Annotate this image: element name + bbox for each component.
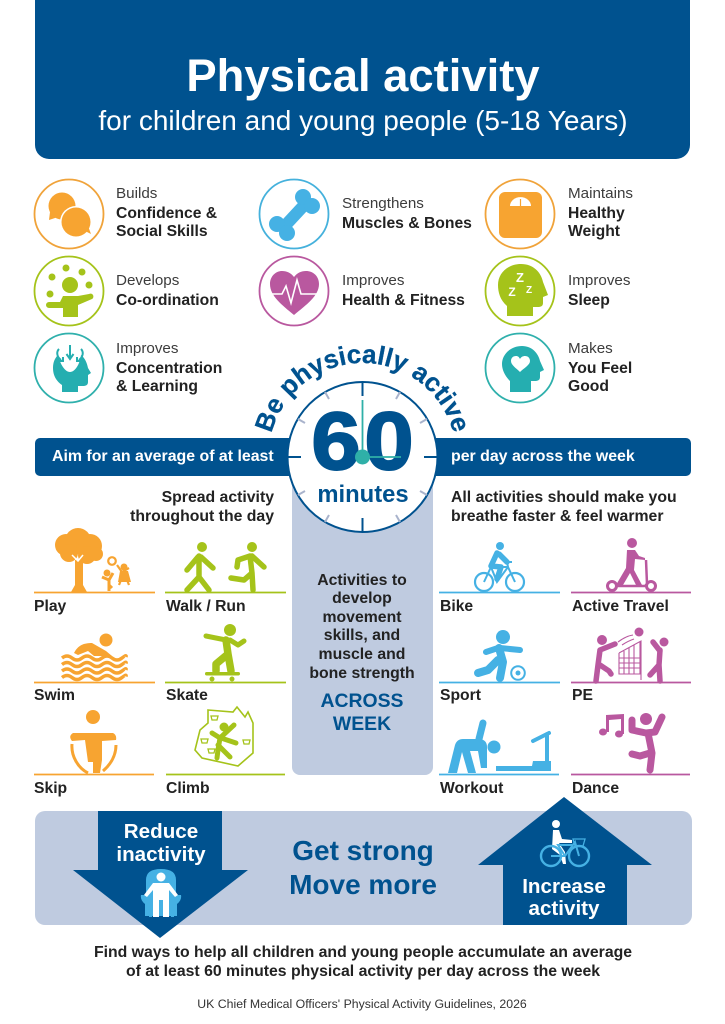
text: all activities	[451, 489, 677, 525]
panel: across week: develop	[332, 590, 392, 607]
benefit: confidence and social skills	[34, 180, 217, 248]
activity: swim: Swim	[34, 687, 75, 704]
aim bar: per day across the week	[451, 448, 635, 465]
text: all activities: breathe faster & feel warmer	[451, 508, 663, 525]
benefit: co-ordination: Co-ordination	[116, 292, 219, 309]
benefit: muscles and bones: Muscles & Bones	[342, 215, 472, 232]
benefit: feel good: Makes	[568, 340, 613, 357]
activity: active travel	[571, 538, 691, 615]
subtitle: for children and young people (5-18 Years)	[98, 105, 628, 136]
activity: dance	[571, 713, 690, 797]
arrow: reduce inactivity: Reduce	[124, 820, 198, 843]
60: 6	[311, 396, 361, 487]
panel: get strong move more: Get strong	[292, 835, 434, 866]
benefit: sleep: Improves	[568, 272, 631, 289]
activity: swim	[34, 634, 155, 704]
title: Physical activity	[186, 50, 540, 101]
activity: sport: Sport	[440, 687, 482, 704]
panel: across week: WEEK	[333, 713, 391, 735]
source credit: UK Chief Medical Officers' Physical Activity Guidelines, 2026	[197, 997, 527, 1011]
text: spread activity	[130, 489, 274, 525]
panel: across week: skills, and	[324, 627, 400, 644]
panel: across week	[292, 470, 433, 775]
arrow: increase activity: activity	[529, 897, 600, 920]
text: all activities: All activities should make you	[451, 489, 677, 506]
benefit: confidence and social skills: Confidence &	[116, 205, 217, 222]
activity: skip	[34, 710, 154, 797]
benefit: healthy weight	[486, 180, 633, 248]
activity: pe	[571, 628, 691, 704]
benefit: concentration and learning	[34, 334, 222, 402]
activity: skate	[165, 624, 286, 704]
activity: climb	[166, 707, 285, 797]
60	[311, 396, 414, 487]
panel: get strong move more	[35, 811, 692, 925]
benefit: concentration and learning: & Learning	[116, 378, 198, 395]
minutes: minutes	[317, 481, 409, 508]
panel: benefits	[34, 180, 633, 402]
footer message: of at least 60 minutes physical activity per day across the week	[126, 963, 600, 980]
clock	[288, 382, 438, 532]
activity: bike: Bike	[440, 598, 473, 615]
panel: across week: muscle and	[319, 646, 405, 663]
activity: skate: Skate	[166, 687, 208, 704]
panel: across week: movement	[322, 609, 402, 626]
benefit: health and fitness: Health & Fitness	[342, 292, 465, 309]
benefit: healthy weight: Healthy	[568, 205, 625, 222]
text: spread activity: throughout the day	[130, 508, 274, 525]
benefit: healthy weight: Maintains	[568, 185, 633, 202]
benefit: sleep: Z	[508, 285, 516, 299]
aim bar	[35, 438, 691, 476]
benefit: muscles and bones	[260, 180, 472, 248]
benefit: feel good	[486, 334, 632, 402]
panel: across week: ACROSS	[321, 690, 404, 712]
benefit: feel good: Good	[568, 378, 609, 395]
footer message	[94, 944, 632, 980]
benefit: sleep: Z	[526, 285, 532, 296]
benefit: sleep	[486, 256, 631, 326]
benefit: confidence and social skills: Social Skills	[116, 223, 208, 240]
benefit: healthy weight: Weight	[568, 223, 621, 240]
benefit: concentration and learning: Concentration	[116, 360, 222, 377]
panel: across week: Activities to	[317, 572, 407, 589]
benefit: feel good: You Feel	[568, 360, 632, 377]
arrow: reduce inactivity: inactivity	[116, 843, 206, 866]
activity: dance: Dance	[572, 780, 619, 797]
activity: workout	[439, 723, 559, 797]
header banner	[35, 0, 690, 159]
activity: active travel: Active Travel	[572, 598, 669, 615]
benefit: sleep: Z	[516, 270, 524, 285]
text: spread activity: Spread activity	[162, 489, 274, 506]
activity: pe: PE	[572, 687, 593, 704]
activity: walk / run: Walk / Run	[166, 598, 246, 615]
heading: be physically active: Be physically active	[254, 346, 466, 432]
arrow: increase activity: Increase	[522, 875, 606, 898]
activity: bike	[439, 542, 560, 615]
activity: play: Play	[34, 598, 67, 615]
panel: get strong move more: Move more	[289, 869, 437, 900]
benefit: confidence and social skills: Builds	[116, 185, 158, 202]
benefit: co-ordination: Develops	[116, 272, 180, 289]
icon: cyclist	[541, 820, 589, 866]
arrow: increase activity	[478, 797, 652, 925]
panel: across week: bone strength	[309, 665, 415, 682]
icon: person in armchair	[141, 869, 181, 917]
60: 0	[364, 396, 414, 487]
clock hands	[355, 400, 401, 464]
benefit: muscles and bones: Strengthens	[342, 195, 424, 212]
footer message: Find ways to help all children and young people accumulate an average	[94, 944, 632, 961]
benefit: health and fitness: Improves	[342, 272, 405, 289]
activity: play	[34, 528, 155, 615]
benefit: co-ordination	[34, 256, 219, 326]
activity: walk / run	[165, 542, 286, 615]
activity: sport	[439, 630, 560, 704]
activity: skip: Skip	[34, 780, 67, 797]
activity: climb: Climb	[166, 780, 210, 797]
aim bar: Aim for an average of at least	[52, 448, 274, 465]
benefit: health and fitness	[260, 256, 465, 326]
arrow: reduce inactivity	[73, 811, 248, 938]
benefit: sleep: Sleep	[568, 292, 610, 309]
activity: workout: Workout	[440, 780, 504, 797]
benefit: concentration and learning: Improves	[116, 340, 179, 357]
